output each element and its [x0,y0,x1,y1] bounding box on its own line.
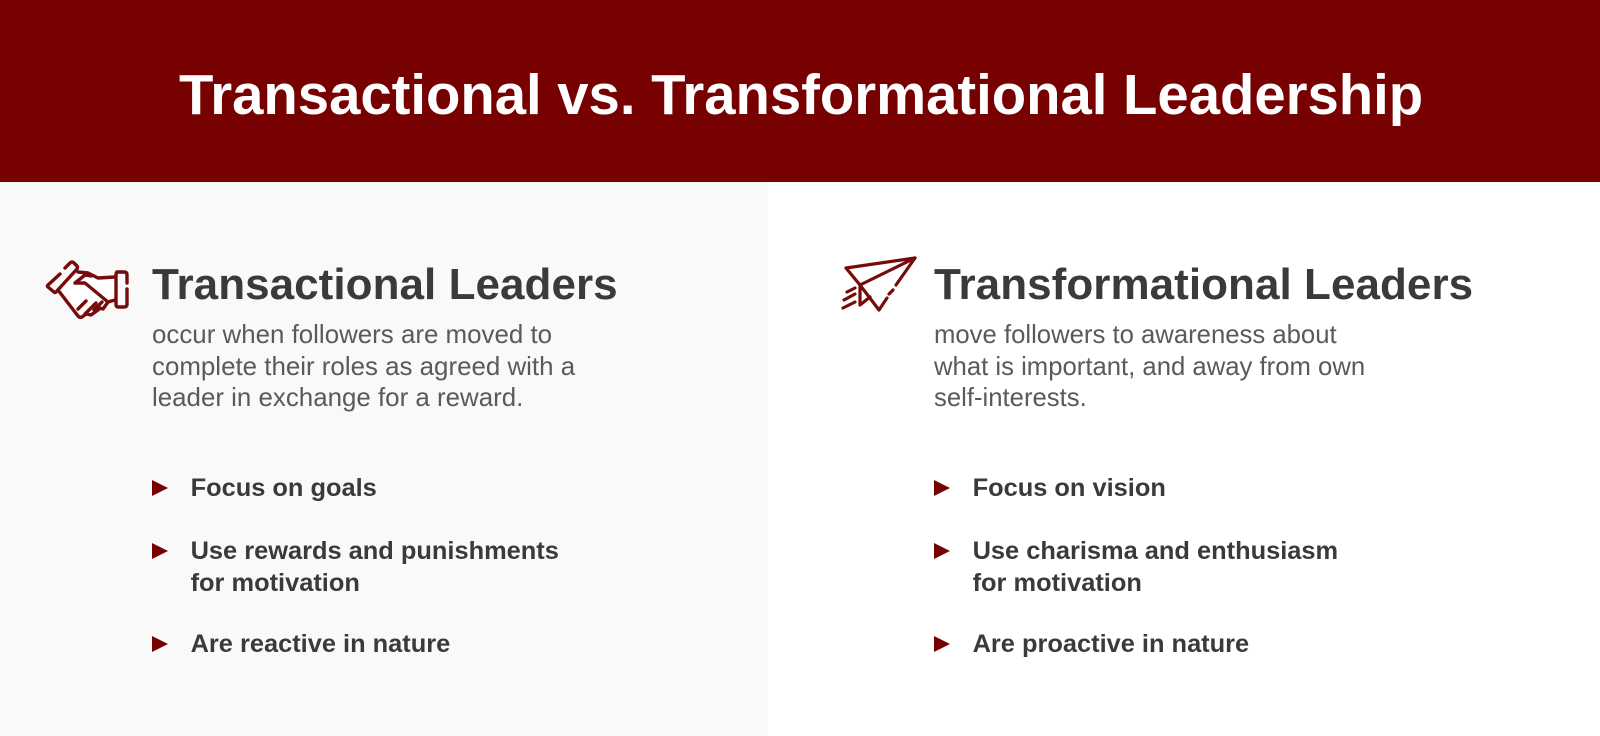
description: transformational: what is important, and away from own [934,353,1365,381]
arrow bullet [934,480,950,496]
bullet text: for motivation [973,569,1142,597]
bullet text: Focus on goals [191,474,377,502]
icon: handshake [46,260,129,320]
bullet text: Focus on vision [973,474,1166,502]
description: transactional: leader in exchange for a reward. [152,384,523,412]
bullet text: for motivation [191,569,360,597]
description: transactional: complete their roles as agreed with a [152,353,575,381]
title: Transactional vs. Transformational Leadership [179,63,1423,126]
arrow bullet [934,543,950,559]
icon: paper plane [841,256,917,312]
description: transformational: self-interests. [934,384,1087,412]
bullet text [973,537,1338,597]
description: transformational: move followers to awareness about [934,321,1337,349]
bullet text: Are reactive in nature [191,630,450,658]
bullet list: transformational [934,474,1338,658]
header banner [0,0,1600,182]
description: transactional [152,321,576,412]
bullet text: Are proactive in nature [973,630,1249,658]
heading: transformational leaders: Transformational Leaders [934,260,1473,309]
arrow bullet [152,543,168,559]
panel: transactional leaders [0,182,768,736]
bullet text [191,537,559,597]
heading: transactional leaders: Transactional Leaders [152,260,618,309]
bullet text: Use charisma and enthusiasm [973,537,1338,565]
arrow bullet [152,636,168,652]
arrow bullet [934,636,950,652]
description: transformational [934,321,1365,412]
bullet list: transactional [152,474,559,658]
bullet text: Use rewards and punishments [191,537,559,565]
arrow bullet [152,480,168,496]
description: transactional: occur when followers are moved to [152,321,552,349]
